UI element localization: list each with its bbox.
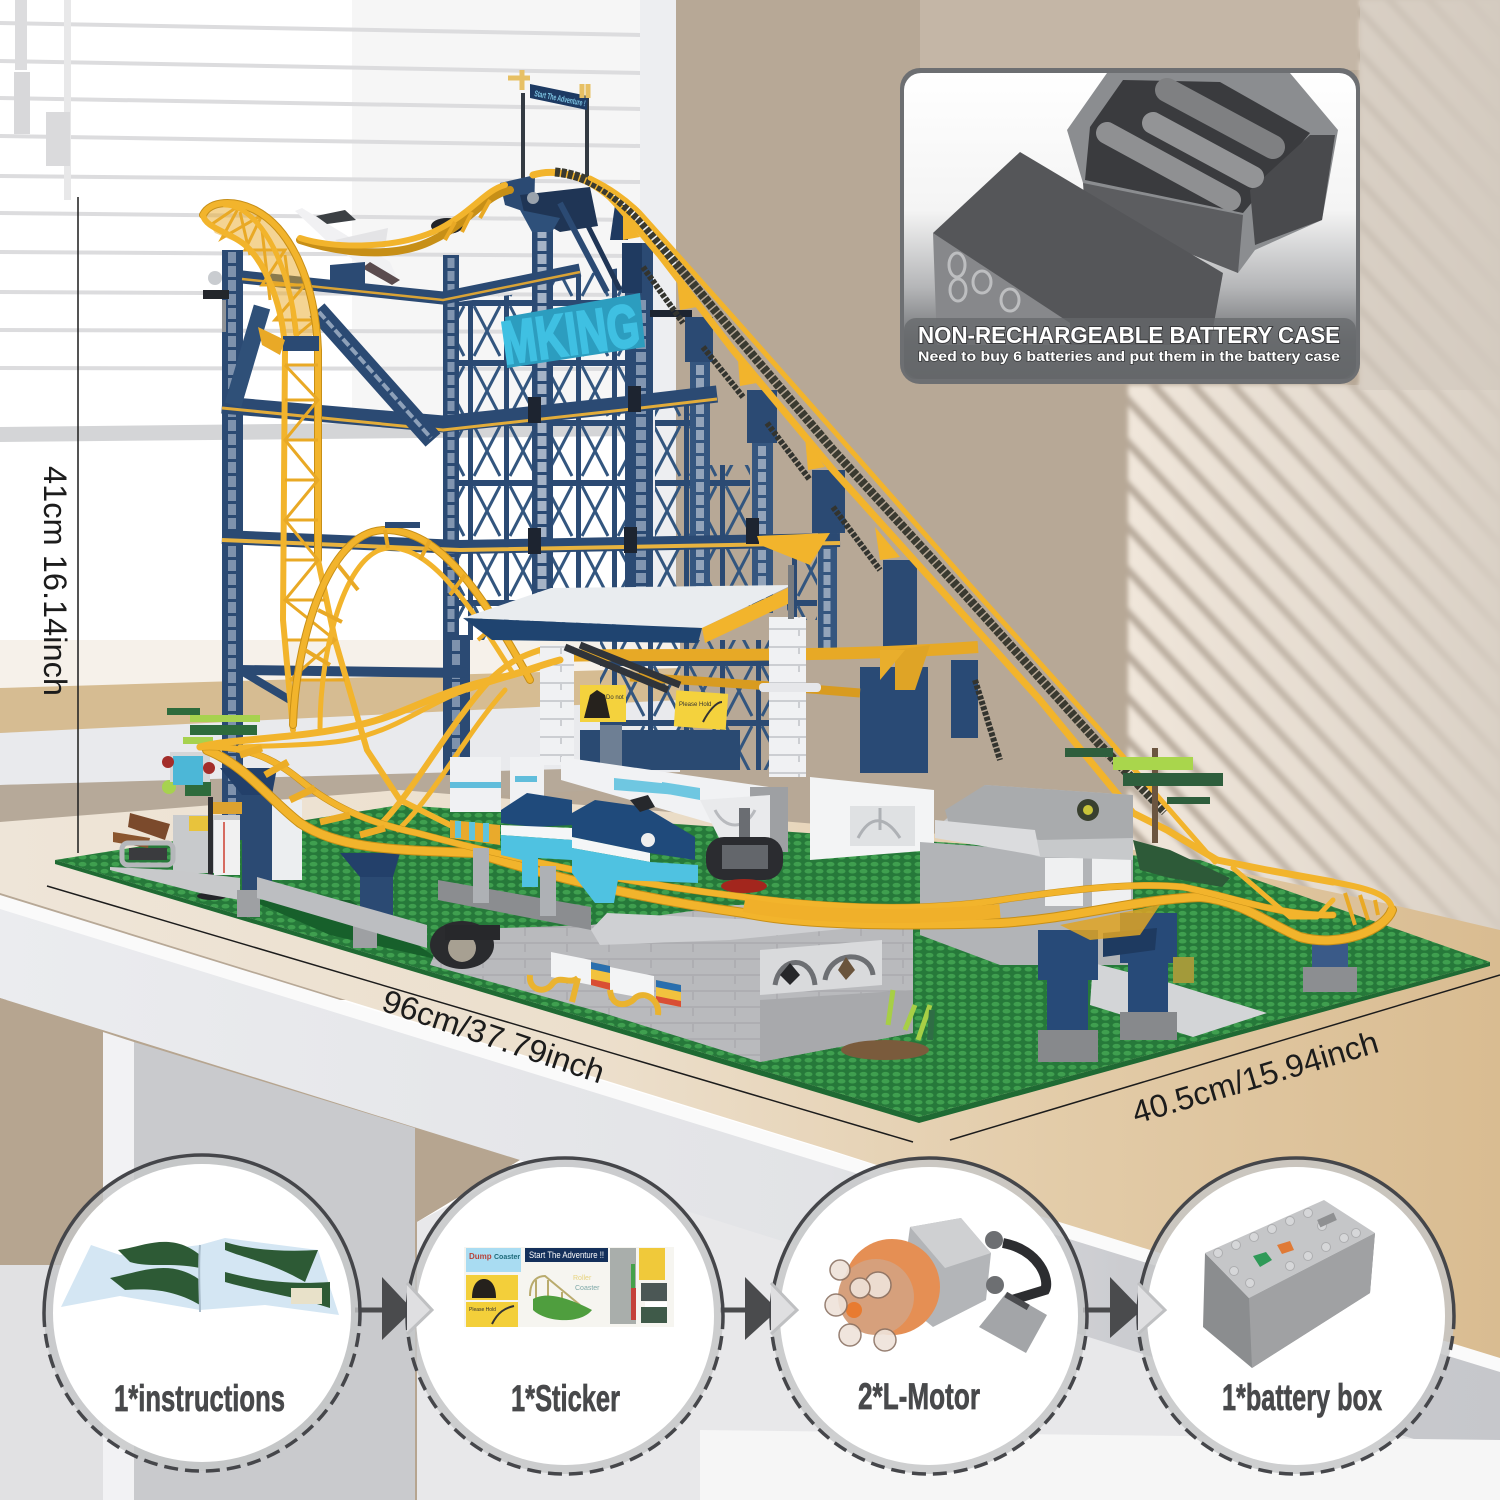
table top <box>0 790 1500 1361</box>
warning sign: handrail: Please Hold <box>679 702 711 708</box>
label: 1*battery box <box>1222 1377 1382 1418</box>
right building with clear lid <box>920 785 1133 965</box>
battery case cover <box>933 152 1223 345</box>
top sign: Start The Adventure ! <box>534 88 587 108</box>
baseplate <box>55 805 1490 1123</box>
label: 1*instructions <box>114 1378 285 1419</box>
coaster train <box>501 793 698 903</box>
small loop <box>293 522 560 830</box>
item: instructions <box>44 1155 360 1471</box>
tower frame <box>222 225 978 840</box>
icon: sticker sheet: Please Hold <box>469 1307 496 1313</box>
top sign <box>508 70 588 178</box>
item: sticker <box>407 1158 723 1474</box>
mid background blocks in station <box>580 725 740 775</box>
icon: sticker sheet <box>464 1247 674 1327</box>
lattice panels <box>446 267 817 770</box>
background: wall <box>0 0 1500 1000</box>
MKING logo: MKING <box>497 291 643 377</box>
lift machinery <box>500 175 628 292</box>
roller coaster model <box>55 70 1490 1123</box>
big vertical loop <box>203 202 450 825</box>
left station: tree <box>162 708 260 796</box>
icon: instruction booklet <box>61 1238 339 1315</box>
arrow notch <box>771 1283 797 1334</box>
grey station base <box>430 880 913 1062</box>
background: window sill and ledge bands <box>0 640 680 822</box>
silver posts <box>473 848 556 916</box>
label: 1*Sticker <box>511 1378 620 1419</box>
right navy supports <box>1038 913 1357 1062</box>
warning sign: hands: Do not <box>606 695 624 701</box>
length dimension: 96cm/37.79inch <box>378 982 609 1090</box>
battery case tray <box>1067 73 1338 273</box>
icon: sticker sheet: Dump <box>469 1252 492 1261</box>
icon: sticker sheet: Coaster <box>494 1254 520 1261</box>
arrow connectors <box>355 1277 1142 1340</box>
right tree <box>1065 748 1230 887</box>
arrow 3 <box>1083 1277 1142 1338</box>
flywheel <box>706 808 783 893</box>
height dimension: 41cm 16.14inch <box>37 466 73 696</box>
lift hill incline with chain <box>533 172 1217 862</box>
horizontal beams <box>222 270 840 700</box>
length dimension <box>47 886 913 1142</box>
gold clamp <box>757 533 830 565</box>
arrow notch <box>1138 1283 1165 1334</box>
warning sign: hands <box>580 685 626 722</box>
left and mid navy supports <box>220 768 427 948</box>
rear car <box>501 793 572 887</box>
background: window with blinds <box>0 0 676 760</box>
width dimension: 40.5cm/15.94inch <box>1128 1024 1382 1131</box>
arrow 1 <box>355 1277 413 1340</box>
white pillars <box>540 565 821 777</box>
panel heading: NON-RECHARGEABLE BATTERY CASE <box>918 322 1340 348</box>
icon: motor <box>825 1218 1047 1353</box>
columns <box>222 225 978 840</box>
station platform and fence <box>450 757 934 860</box>
front car <box>572 795 698 903</box>
panel: battery case <box>900 68 1360 384</box>
MKING logo <box>497 291 645 377</box>
icon: sticker sheet: Start The Adventure !! <box>529 1250 604 1260</box>
left station: gate and building <box>110 752 243 900</box>
background: sunlight stripes on wall <box>920 0 1500 935</box>
station shelter roof <box>463 585 792 643</box>
icon: sticker sheet: Coaster <box>575 1285 600 1292</box>
wheel <box>431 218 463 234</box>
chain wheel <box>430 921 500 969</box>
item: L-motor <box>771 1158 1087 1474</box>
arrow 2 <box>720 1277 778 1340</box>
panel note: Need to buy 6 batteries and put them in the battery case <box>918 348 1340 364</box>
station back structure: rails behind roof <box>540 645 978 693</box>
warning sign: handrail <box>674 690 728 730</box>
space under table <box>0 998 1500 1500</box>
base stripes and gold scrolls <box>530 952 681 1015</box>
width dimension <box>950 975 1500 1140</box>
left station: bench <box>113 813 173 865</box>
reed plant <box>841 990 932 1060</box>
dark tubes <box>565 645 680 690</box>
label: 2*L-Motor <box>858 1376 980 1417</box>
item: battery box <box>1138 1158 1454 1474</box>
minifigure <box>203 271 229 332</box>
icon: battery box <box>1203 1200 1375 1368</box>
icon: sticker sheet: Roller <box>573 1275 592 1282</box>
space shuttle <box>295 208 400 285</box>
table front edge <box>0 895 1500 1466</box>
ride to the lift hill <box>300 185 510 252</box>
connector clips <box>528 310 759 554</box>
arrow notch <box>407 1283 432 1334</box>
front track main run <box>200 660 1392 940</box>
